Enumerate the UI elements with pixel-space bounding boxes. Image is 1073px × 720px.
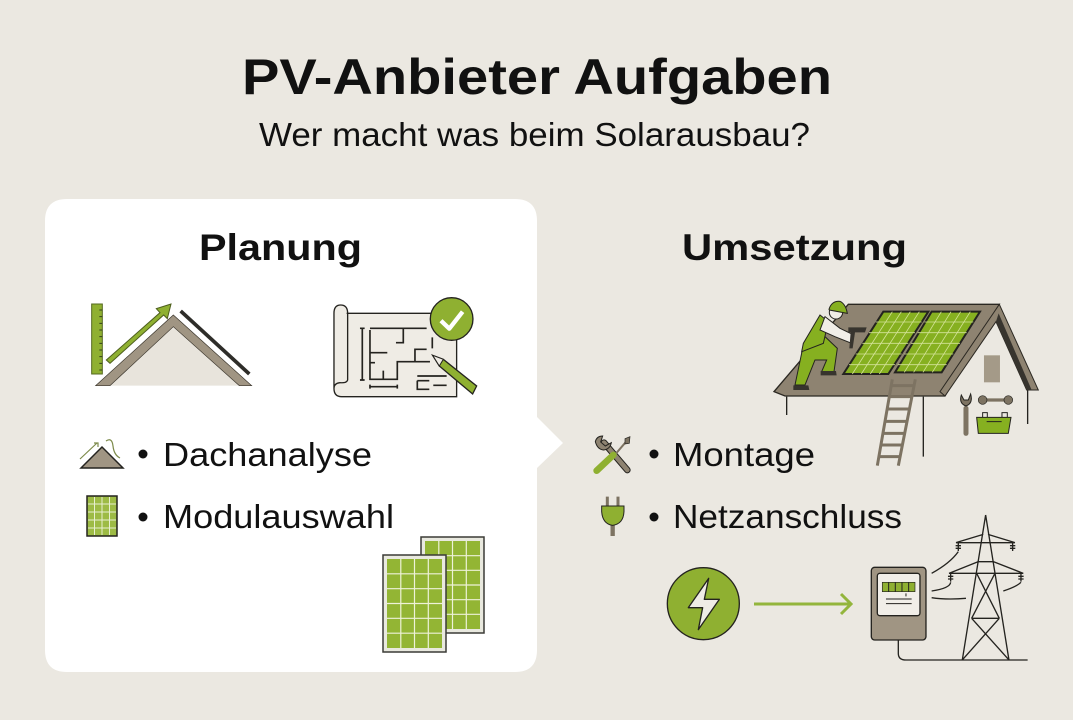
panel background with pointer <box>45 199 563 672</box>
ladder <box>877 379 915 466</box>
icon: floor plan with check mark <box>334 298 477 397</box>
icon: wrench and screwdriver <box>595 436 630 471</box>
icon: small solar module <box>87 496 117 536</box>
worker <box>795 337 837 385</box>
icon: small roof <box>81 447 123 468</box>
illustration: installer on roof with solar panels <box>774 301 1038 466</box>
subtitle: Wer macht was beim Solarausbau? <box>259 116 810 153</box>
list item: Dachanalyse: Dachanalyse <box>163 436 372 473</box>
arrow: power to meter <box>754 594 851 614</box>
power pylon <box>932 515 1024 660</box>
list item: Modulauswahl: Modulauswahl <box>163 498 394 535</box>
title: PV-Anbieter Aufgaben <box>242 49 832 105</box>
icon: roof measurement <box>92 304 252 386</box>
panel: Umsetzung <box>595 227 1038 660</box>
list item: Netzanschluss <box>602 497 902 536</box>
list item: Montage <box>595 436 815 473</box>
list item: Dachanalyse <box>80 436 372 473</box>
icon: stacked solar modules <box>383 537 484 652</box>
heading: Planung: Planung <box>199 227 362 268</box>
heading: Umsetzung: Umsetzung <box>682 227 907 268</box>
window <box>984 355 1000 382</box>
solar panels <box>843 312 928 374</box>
panel: Planung <box>45 199 563 672</box>
roof <box>774 304 999 396</box>
icon: plug <box>602 497 624 536</box>
tools <box>958 408 973 433</box>
icon: lightning bolt <box>667 568 739 640</box>
list item: Modulauswahl <box>87 496 394 536</box>
list item: Montage: Montage <box>673 436 815 473</box>
list item: Netzanschluss: Netzanschluss <box>673 498 902 535</box>
electricity meter <box>871 567 1028 660</box>
